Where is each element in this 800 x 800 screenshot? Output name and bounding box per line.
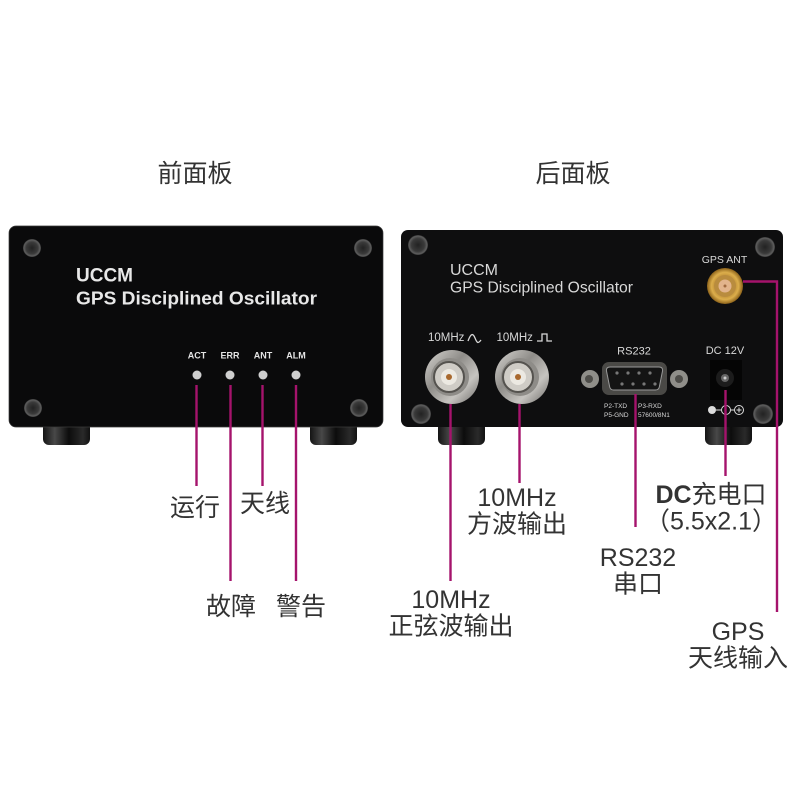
GPS ANT connector [702, 254, 748, 304]
label: DC charging port: （5.5x2.1） [645, 508, 777, 536]
front product title: UCCM [76, 266, 133, 286]
LED labels: ERR [220, 350, 240, 360]
RS232 connector: 57600/8N1 [638, 412, 670, 419]
front screws [23, 239, 372, 417]
RS232 connector: P3-RXD [638, 403, 662, 410]
RS232 connector: RS232 [617, 346, 651, 358]
LED labels: ALM [286, 350, 306, 360]
front case [9, 226, 383, 427]
label: alarm: 警告 [276, 593, 326, 621]
label: 10MHz sine output: 正弦波输出 [388, 612, 514, 640]
DC 12V jack [706, 345, 745, 414]
LED labels: ANT [254, 350, 273, 360]
panel: front device [9, 226, 383, 445]
10MHz square connector [495, 332, 552, 404]
callout lines: rear [450, 282, 777, 612]
label: GPS antenna input: GPS [712, 618, 764, 646]
10MHz square connector: 10MHz [496, 332, 533, 344]
rear product title: GPS Disciplined Oscillator [450, 280, 634, 297]
RS232 connector: P2-TXD [604, 403, 627, 410]
rear product title: UCCM [450, 262, 498, 279]
label: fault: 故障 [206, 593, 256, 621]
rear product title [450, 262, 634, 297]
front feet [43, 422, 357, 445]
rear screws [408, 235, 775, 424]
RS232 connector [581, 346, 688, 419]
RS232 connector: P5-GND [604, 412, 629, 419]
DC 12V jack: DC 12V [706, 345, 745, 357]
10MHz sine connector [425, 332, 481, 404]
label: 10MHz sine output: 10MHz [411, 586, 491, 614]
label: RS232 serial: RS232 [600, 544, 676, 572]
label: RS232 serial: 串口 [613, 570, 663, 598]
GPS ANT connector: GPS ANT [702, 254, 748, 266]
LED labels: ACT [188, 350, 207, 360]
rear case [401, 230, 783, 427]
callout lines: front [196, 385, 296, 581]
label: DC charging port: DC充电口 [655, 481, 767, 509]
front product title [76, 266, 317, 308]
heading: front panel: 前面板 [157, 160, 233, 188]
front product title: GPS Disciplined Oscillator [76, 288, 317, 308]
label: antenna: 天线 [240, 490, 290, 518]
LED labels [188, 350, 306, 360]
label: run: 运行 [170, 494, 220, 522]
heading: rear panel: 后面板 [535, 160, 611, 188]
LEDs [192, 370, 300, 380]
rear feet [438, 422, 752, 445]
panel: rear device [401, 230, 783, 445]
label: 10MHz square output: 10MHz [477, 484, 557, 512]
10MHz sine connector: 10MHz [428, 332, 465, 344]
label: GPS antenna input: 天线输入 [688, 644, 788, 672]
label: 10MHz square output: 方波输出 [467, 510, 567, 538]
